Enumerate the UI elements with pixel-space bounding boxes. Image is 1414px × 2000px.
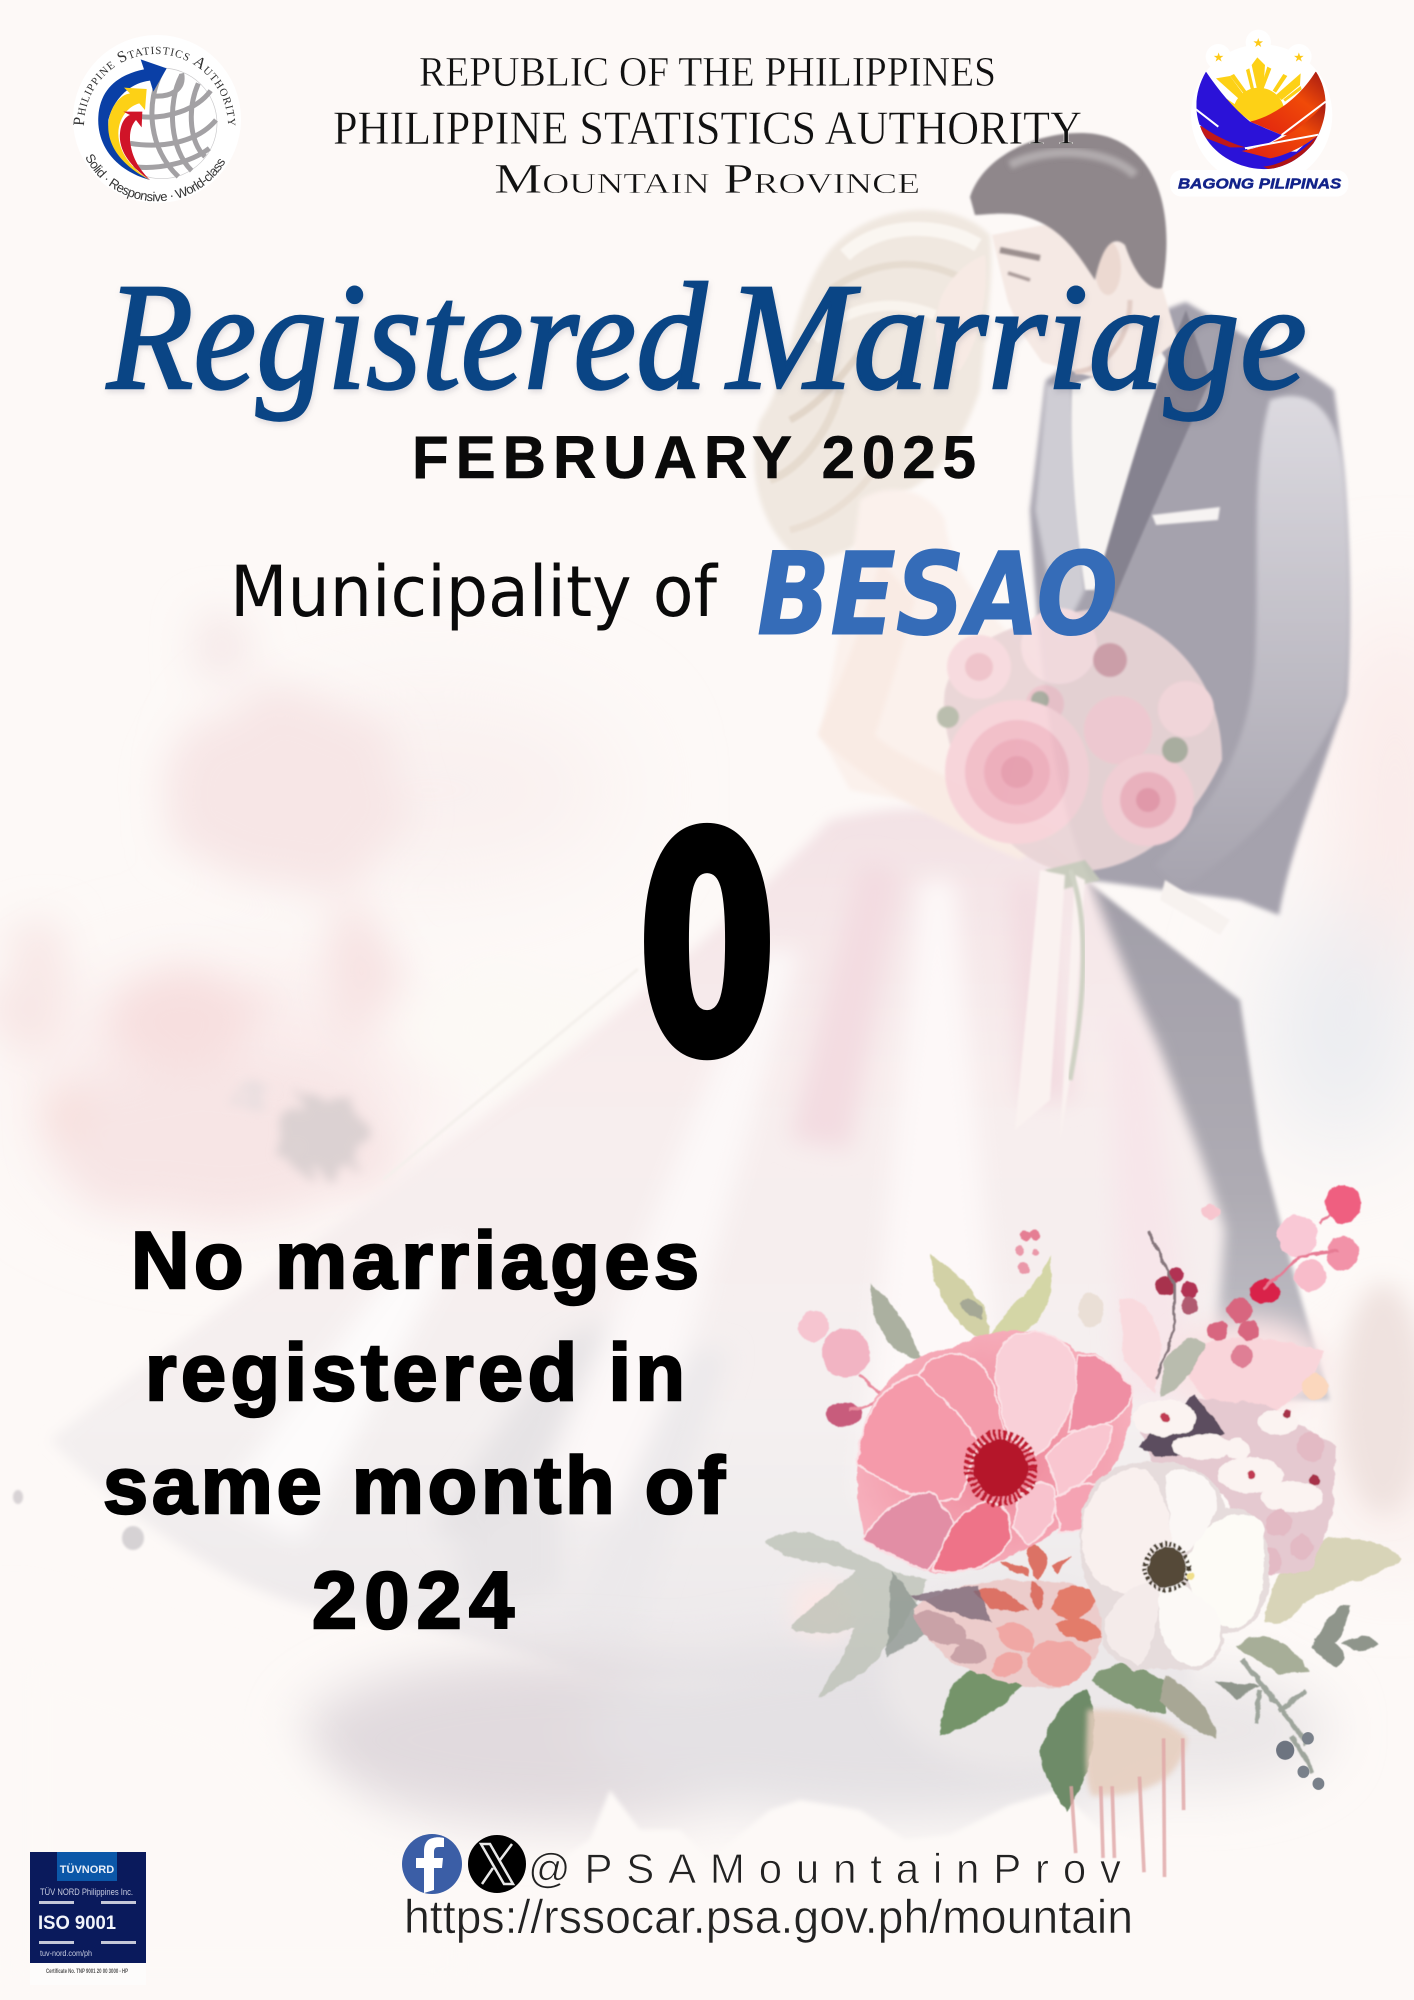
comparison statement: same month of (103, 1441, 726, 1531)
stars: ★ (1253, 36, 1264, 50)
header: Bagong Pilipinas logo (1178, 38, 1342, 189)
logo wordmark: BAGONG PILIPINAS (1178, 177, 1342, 193)
header: PSA seal logo (73, 46, 236, 202)
groom hair highlight (1010, 153, 1135, 175)
front floral bouquet (766, 1184, 1414, 1877)
groom jacket (1030, 302, 1349, 915)
social handle: @PSAMountainProv (528, 1845, 1121, 1892)
footer social links (402, 1834, 1133, 1943)
seal motto: Solid · Responsive · World-class (86, 154, 225, 202)
title (106, 253, 1307, 422)
blue arrow (98, 59, 167, 180)
pink eucalyptus and berries (799, 1184, 1361, 1426)
dark seed sprig (1276, 1732, 1324, 1790)
woven sash emblem (1196, 72, 1326, 170)
bride hair strands (770, 229, 978, 530)
stars (1213, 36, 1305, 64)
sun (1216, 57, 1302, 123)
bride back and arm (820, 490, 1040, 820)
white flower (1080, 1462, 1270, 1671)
bouquet ribbons (1015, 870, 1085, 1140)
agency line: PHILIPPINE STATISTICS AUTHORITY (333, 102, 1082, 155)
bouquet stem (1070, 870, 1083, 1080)
groom lapel (1095, 310, 1210, 610)
stars: ★ (1213, 50, 1224, 64)
mauve grey lower wash (0, 1620, 1414, 2000)
ISO 9001 badge: ISO 9001 (38, 1913, 116, 1934)
ISO 9001 badge: Certificate No. TNP 9001 20 00 3000 - HP (46, 1969, 128, 1975)
yellow arrow (108, 88, 150, 180)
bride face (936, 255, 986, 370)
pocket square (1152, 507, 1220, 525)
small blossoms cluster (1133, 1394, 1335, 1576)
jacket left panel (1035, 385, 1085, 640)
stars: ★ (1293, 50, 1305, 64)
shirt cuff (1160, 880, 1230, 935)
groom sleeve (1155, 396, 1350, 890)
groom face and neck (992, 210, 1178, 385)
globe (98, 59, 217, 180)
republic line: REPUBLIC OF THE PHILIPPINES (419, 50, 996, 96)
ISO 9001 badge: TÜV NORD Philippines Inc. (40, 1887, 133, 1897)
comparison statement: registered in (145, 1328, 685, 1418)
icon: X (468, 1835, 526, 1893)
ISO 9001 badge (30, 1852, 146, 1985)
watercolor background washes (0, 600, 1414, 1550)
large pink peony (857, 1331, 1133, 1573)
groom facial features (1000, 241, 1130, 372)
groom hair (970, 133, 1166, 289)
website url: https://rssocar.psa.gov.ph/mountain (404, 1890, 1133, 1943)
bouquet background wash (791, 1284, 1414, 1772)
dress highlights (220, 860, 1200, 1660)
date subtitle: FEBRUARY 2025 (412, 424, 976, 491)
province line: Mountain Province (494, 157, 920, 203)
ISO 9001 badge: TÜVNORD (60, 1863, 114, 1876)
top bouquet (937, 608, 1222, 890)
paint drips (1071, 1710, 1187, 1877)
comparison statement: No marriages (131, 1216, 699, 1306)
municipality label: Municipality of (230, 551, 718, 633)
groom shirt (1072, 350, 1186, 590)
title: Registered (106, 253, 707, 422)
municipality name: BESAO (757, 528, 1118, 661)
comparison statement (103, 1216, 726, 1646)
ISO 9001 badge: tuv-nord.com/ph (40, 1949, 92, 1958)
header text block (333, 50, 1082, 203)
logo sticker outline (1170, 30, 1348, 197)
red arrow (120, 112, 150, 180)
groom trousers (1085, 880, 1330, 1400)
grey pigment smudge (236, 1079, 364, 1177)
comparison statement: 2024 (312, 1556, 514, 1646)
wedding dress skirt (50, 808, 1225, 1690)
stray paint dots (13, 1490, 144, 1550)
bride hair (754, 210, 991, 560)
seal name: Philippine Statistics Authority (73, 46, 236, 126)
dress edge highlight (383, 969, 638, 1180)
coral flower (909, 1542, 1104, 1688)
big number: 0 (639, 774, 775, 1121)
icon: facebook (402, 1834, 462, 1894)
title: Marriage (725, 253, 1307, 422)
leaves and sprigs (766, 1253, 1401, 1812)
